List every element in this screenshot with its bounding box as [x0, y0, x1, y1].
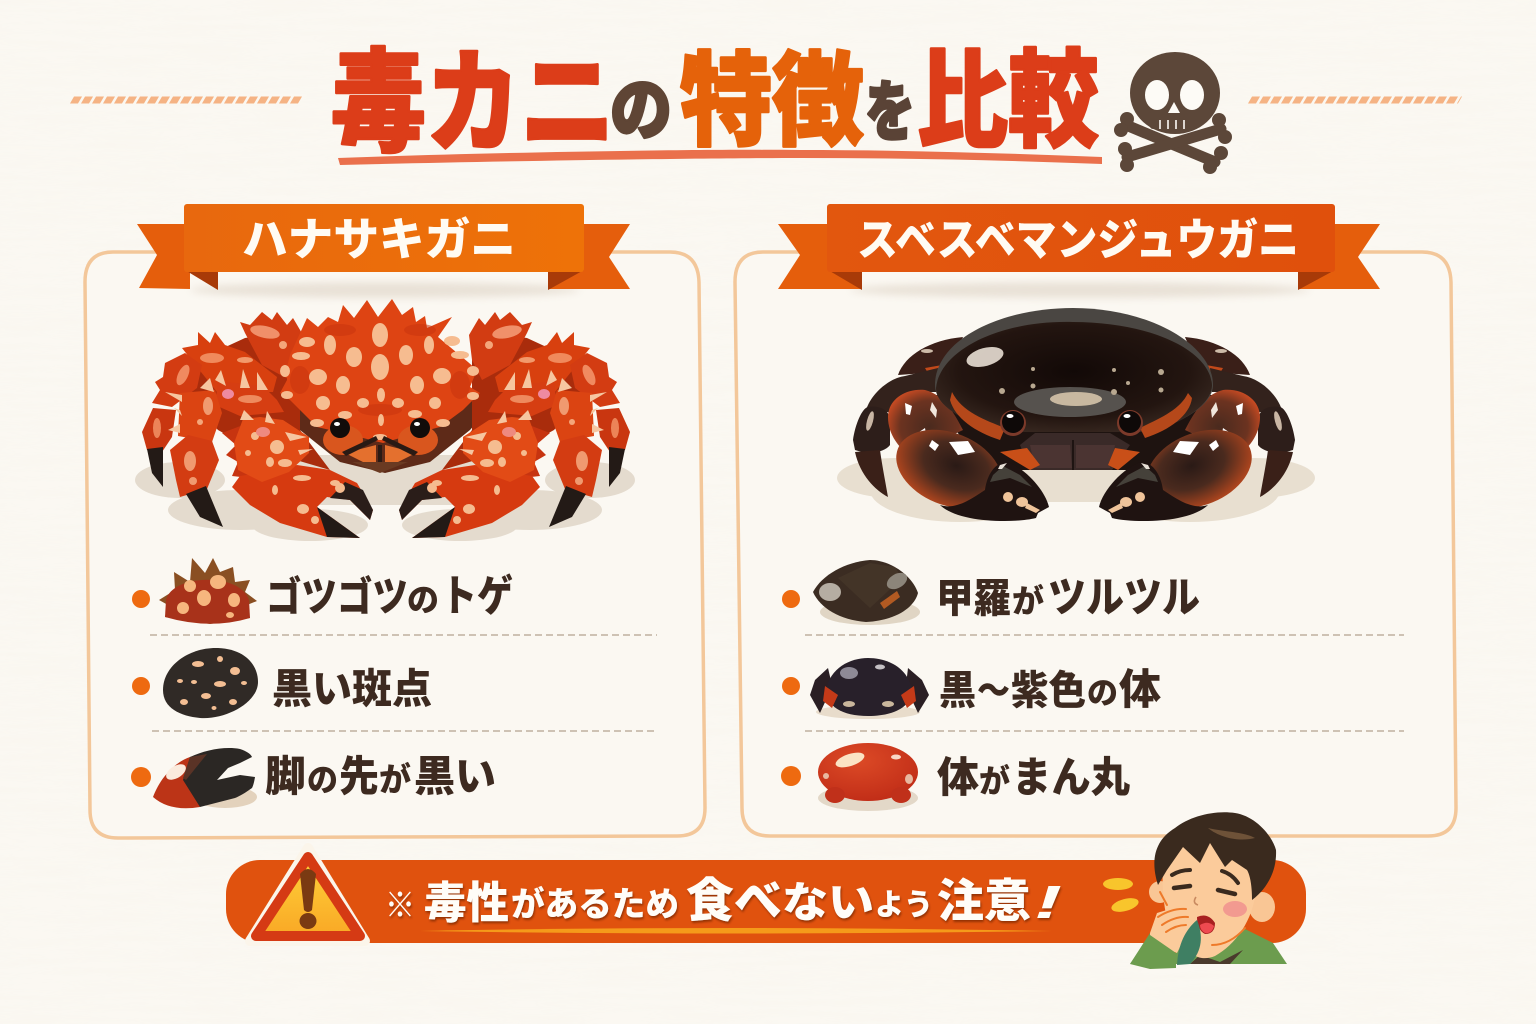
feature: 体がまん丸: が: [979, 763, 1010, 799]
icon: skull and crossbones: [1114, 52, 1232, 174]
warning message: 毒性: [424, 879, 509, 928]
warning message: があるため: [511, 885, 679, 924]
ribbon left: [137, 204, 630, 298]
feature: 体がまん丸: まん丸: [1012, 754, 1130, 801]
warning message: ない: [782, 879, 874, 926]
title: 比較: [917, 43, 1099, 161]
feature: 黒〜紫色の体: の: [1087, 676, 1118, 711]
feature: 脚の先が黒い: 脚: [265, 753, 306, 800]
title underline brush stroke: [338, 150, 1102, 165]
feature: 黒い斑点: 黒い斑点: [272, 666, 432, 712]
feature: 体がまん丸: [781, 743, 1130, 811]
title: 特徴: [680, 45, 864, 159]
panel: ハナサキガニ: [85, 204, 705, 838]
decorative dashes: [72, 96, 303, 104]
warning message: [385, 874, 1062, 928]
feature: 黒〜紫色の体: 紫色: [1011, 669, 1086, 713]
crab illustration: smooth black crab: [837, 308, 1315, 523]
icon: worried marks: [1103, 878, 1140, 914]
feature: 脚の先が黒い: が: [379, 761, 411, 798]
warning message: 注意: [937, 875, 1031, 927]
feature: 黒〜紫色の体: 〜: [977, 671, 1010, 713]
crab illustration: red spiny crab: [135, 299, 635, 541]
icon: boy feeling sick: [1130, 812, 1287, 969]
ribbon label: ハナサキガニ: [242, 214, 516, 265]
feature: 黒〜紫色の体: [782, 658, 1161, 719]
feature: ゴツゴツのトゲ: の: [407, 582, 439, 618]
feature: 脚の先が黒い: [131, 748, 496, 808]
warning message: !: [1034, 876, 1062, 928]
crab face: [323, 418, 438, 473]
feature: 脚の先が黒い: 先: [339, 753, 379, 800]
warning message: 食べ: [686, 874, 782, 927]
carapace: [935, 308, 1213, 432]
feature: 体がまん丸: 体: [937, 754, 979, 801]
title: の: [610, 73, 672, 149]
ribbon right: [778, 204, 1380, 298]
feature: 脚の先が黒い: 黒い: [414, 753, 496, 800]
feature: ゴツゴツのトゲ: トゲ: [441, 573, 513, 621]
title: 毒カニ: [331, 41, 615, 166]
ribbon label: スベスベマンジュウガニ: [857, 216, 1299, 265]
title: を: [865, 75, 915, 149]
feature: 甲羅がツルツル: ツルツル: [1048, 574, 1200, 621]
warning banner: [226, 812, 1306, 969]
orange band: [950, 392, 1005, 440]
warning underline: [420, 928, 1052, 934]
feature: 黒〜紫色の体: 体: [1119, 666, 1161, 713]
feature: ゴツゴツのトゲ: [132, 558, 513, 624]
title: [331, 41, 1099, 166]
panel: スベスベマンジュウガニ: [735, 204, 1456, 836]
warning message: ※: [385, 887, 415, 925]
highlights: [964, 343, 1006, 371]
feature: ゴツゴツのトゲ: ゴツゴツ: [266, 574, 408, 620]
panel frame right: [735, 252, 1456, 836]
feature: 甲羅がツルツル: [782, 560, 1200, 625]
panel frame left: [85, 252, 705, 838]
feature: 脚の先が黒い: の: [307, 762, 338, 798]
feature: 甲羅がツルツル: 甲羅: [936, 577, 1011, 621]
feature: 甲羅がツルツル: が: [1012, 583, 1044, 619]
carapace: [280, 299, 480, 443]
crab face: [1000, 410, 1143, 470]
feature: 黒い斑点: [132, 648, 432, 718]
warning message: よう: [875, 889, 933, 922]
feature: 黒〜紫色の体: 黒: [939, 669, 976, 713]
icon: warning triangle: [250, 848, 365, 941]
